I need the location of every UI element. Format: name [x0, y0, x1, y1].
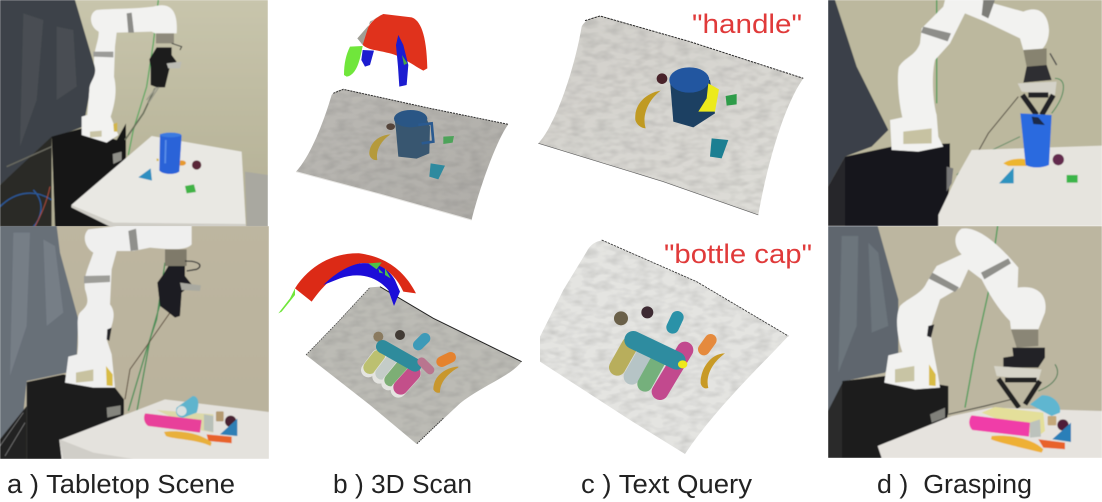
panel: b bottom 3D scan — [278, 253, 522, 444]
objects — [982, 407, 1045, 436]
robot cabinet — [845, 143, 950, 226]
cables — [936, 0, 938, 104]
robot arm — [65, 226, 192, 388]
robot cabinet — [52, 123, 126, 227]
label: handle query: "handle" — [692, 9, 802, 39]
panel: b top 3D scan — [296, 14, 508, 220]
robot arm — [82, 5, 177, 143]
objects — [657, 73, 667, 84]
curtain — [828, 226, 898, 411]
objects — [1003, 159, 1028, 166]
table — [938, 146, 1102, 226]
robot arm — [884, 228, 1046, 389]
floor — [0, 137, 52, 227]
panel: d top grasping photo — [828, 0, 1102, 226]
gripper — [1023, 48, 1047, 67]
caption: a: a ) Tabletop Scene — [7, 471, 235, 499]
panel: c bottom text query — [540, 240, 788, 454]
panel: a bottom tabletop scene photo — [0, 226, 269, 459]
table — [59, 399, 269, 459]
caption: d: d ) Grasping — [877, 471, 1032, 499]
cables — [965, 226, 998, 408]
robot cabinet — [27, 374, 124, 459]
label: bottle cap query: "bottle cap" — [664, 239, 812, 269]
panel: a top tabletop scene photo — [0, 0, 268, 227]
table — [878, 408, 1102, 458]
curtain — [0, 0, 97, 185]
robot arm — [890, 0, 1049, 152]
objects — [157, 158, 159, 161]
projection: grasp heatmap — [278, 253, 416, 313]
objects — [614, 311, 628, 325]
projection: grasp heatmap — [344, 14, 427, 87]
gripper — [156, 33, 174, 43]
cables — [128, 263, 165, 413]
curtain — [828, 0, 888, 187]
table mesh — [306, 287, 522, 444]
side metal table — [245, 172, 268, 227]
objects — [157, 410, 213, 433]
gripper — [165, 249, 187, 266]
table mesh — [538, 16, 803, 215]
table mesh — [540, 241, 788, 454]
caption: b: b ) 3D Scan — [333, 471, 472, 499]
table — [71, 136, 246, 227]
objects — [386, 123, 395, 130]
objects — [373, 332, 383, 342]
panel: c top text query — [538, 16, 803, 215]
table mesh — [296, 89, 508, 220]
green cable — [128, 0, 158, 155]
robot cabinet — [842, 376, 948, 458]
caption: c: c ) Text Query — [581, 471, 752, 499]
curtain — [0, 226, 78, 439]
gripper — [1011, 329, 1038, 348]
panel: d bottom grasping photo — [828, 226, 1102, 458]
